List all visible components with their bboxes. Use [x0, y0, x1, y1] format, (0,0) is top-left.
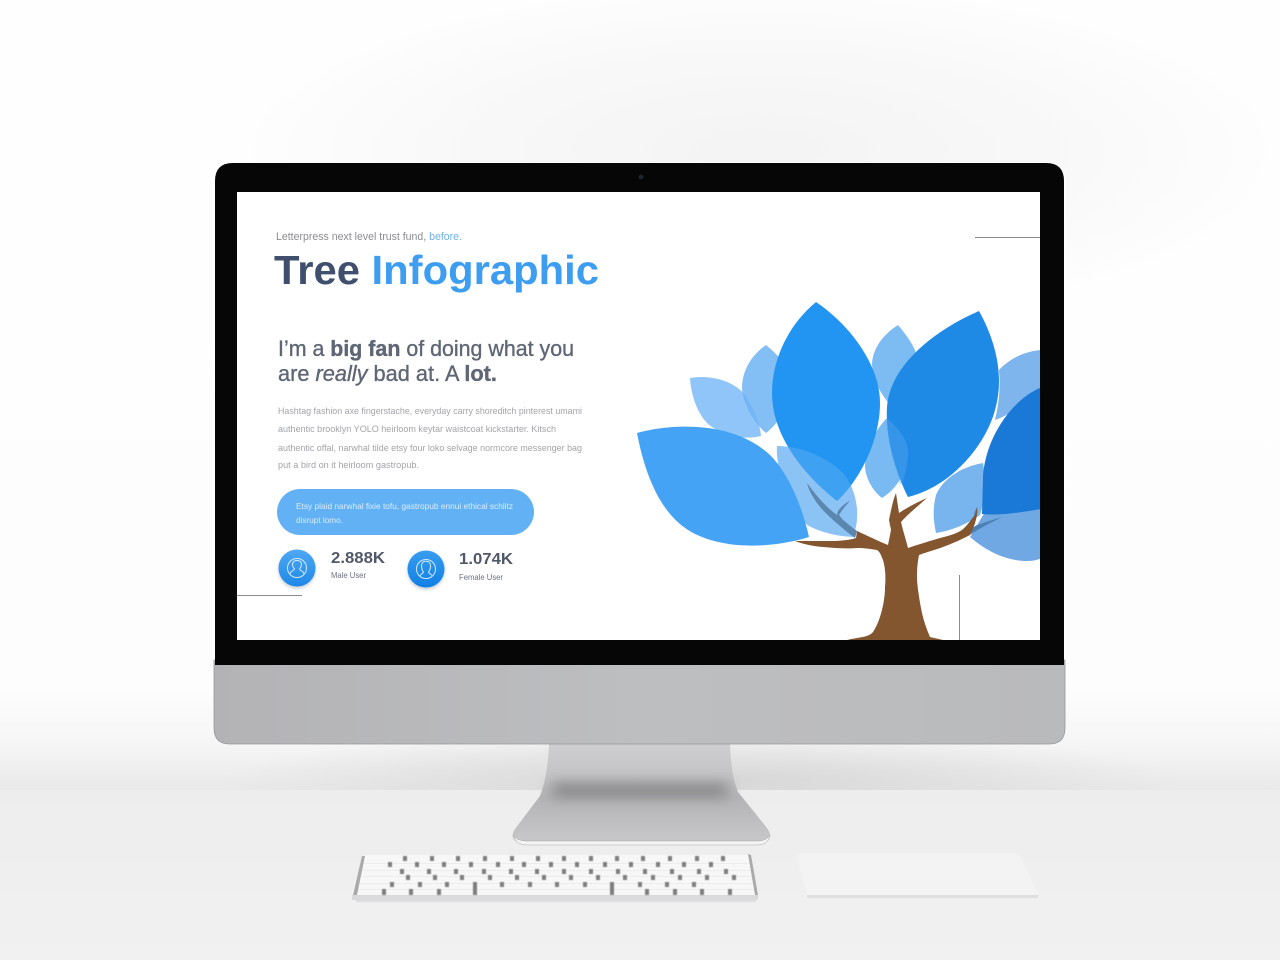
aluminium chin: [214, 660, 1065, 744]
icon: female user: [408, 550, 444, 590]
trackpad: [797, 853, 1038, 898]
tint: lower centre leaf overlap: [887, 418, 908, 486]
leaf: far right pale: [995, 350, 1045, 420]
key gaps: [382, 856, 736, 895]
keyboard front edge: [352, 895, 758, 900]
leaf: large centre: [772, 302, 880, 501]
leaf: lower centre pale: [865, 418, 900, 498]
callout pill: disrupt lomo.: [296, 515, 343, 525]
black bezel: [215, 163, 1064, 665]
callout pill: [277, 489, 534, 535]
title: Tree Infographic: [274, 247, 599, 293]
monitor stand: [513, 744, 770, 845]
leaf: upper left pale: [742, 345, 778, 433]
pale leaves behind: [690, 325, 1045, 561]
monitor glow edge: [213, 162, 1066, 682]
branch behind leaves: [807, 483, 1002, 538]
icon: male user: [278, 550, 316, 588]
desk surface: [0, 790, 1280, 960]
camera: [639, 175, 643, 179]
eyebrow text: Letterpress next level trust fund, before.: [276, 231, 462, 243]
monitor: [213, 162, 1066, 845]
tree illustration: [637, 302, 1045, 640]
keyboard body: [352, 855, 758, 899]
stat: male user: Male User: [331, 571, 366, 580]
leaf: small right pale: [934, 463, 985, 533]
leaf: large right: [887, 311, 999, 497]
keyboard side edges: [353, 854, 758, 895]
leaf: far left pale: [690, 377, 761, 438]
stat: female user: Female User: [459, 573, 503, 582]
subheading line 2: are really bad at. A lot.: [278, 361, 497, 386]
leaf: upper centre pale: [872, 325, 918, 405]
stat: female user: [408, 550, 513, 590]
subheading line 1: I’m a big fan of doing what you: [278, 336, 574, 361]
leaf: dark right: [982, 387, 1042, 515]
screen: [237, 192, 1040, 640]
leaf: bottom right pale: [970, 505, 1042, 561]
tint: lower left leaf overlap: [783, 446, 857, 508]
stat: male user: 2.888K: [331, 550, 385, 567]
body paragraph: [278, 406, 582, 471]
stat: female user: 1.074K: [459, 551, 513, 568]
slide content: [237, 231, 1040, 640]
body paragraph: Hashtag fashion axe fingerstache, everyday carry shoreditch pinterest umami: [278, 406, 582, 417]
body paragraph: put a bird on it heirloom gastropub.: [278, 460, 419, 471]
callout pill: Etsy plaid narwhal fixie tofu, gastropub ennui ethical schlitz: [296, 501, 513, 511]
key row lines: [357, 863, 756, 890]
keyboard: [352, 854, 758, 902]
leaf: lower left pale: [777, 446, 857, 537]
keyboard shadow: [356, 898, 756, 902]
stat: male user: [278, 550, 385, 588]
body paragraph: authentic offal, narwhal tilde etsy four loko selvage normcore messenger bag: [278, 443, 582, 454]
body paragraph: authentic brooklyn YOLO heirloom keytar waistcoat kickstarter. Kitsch: [278, 424, 556, 435]
main leaves: [637, 302, 1042, 546]
tree trunk: [795, 493, 977, 640]
leaf: large left: [637, 427, 809, 546]
